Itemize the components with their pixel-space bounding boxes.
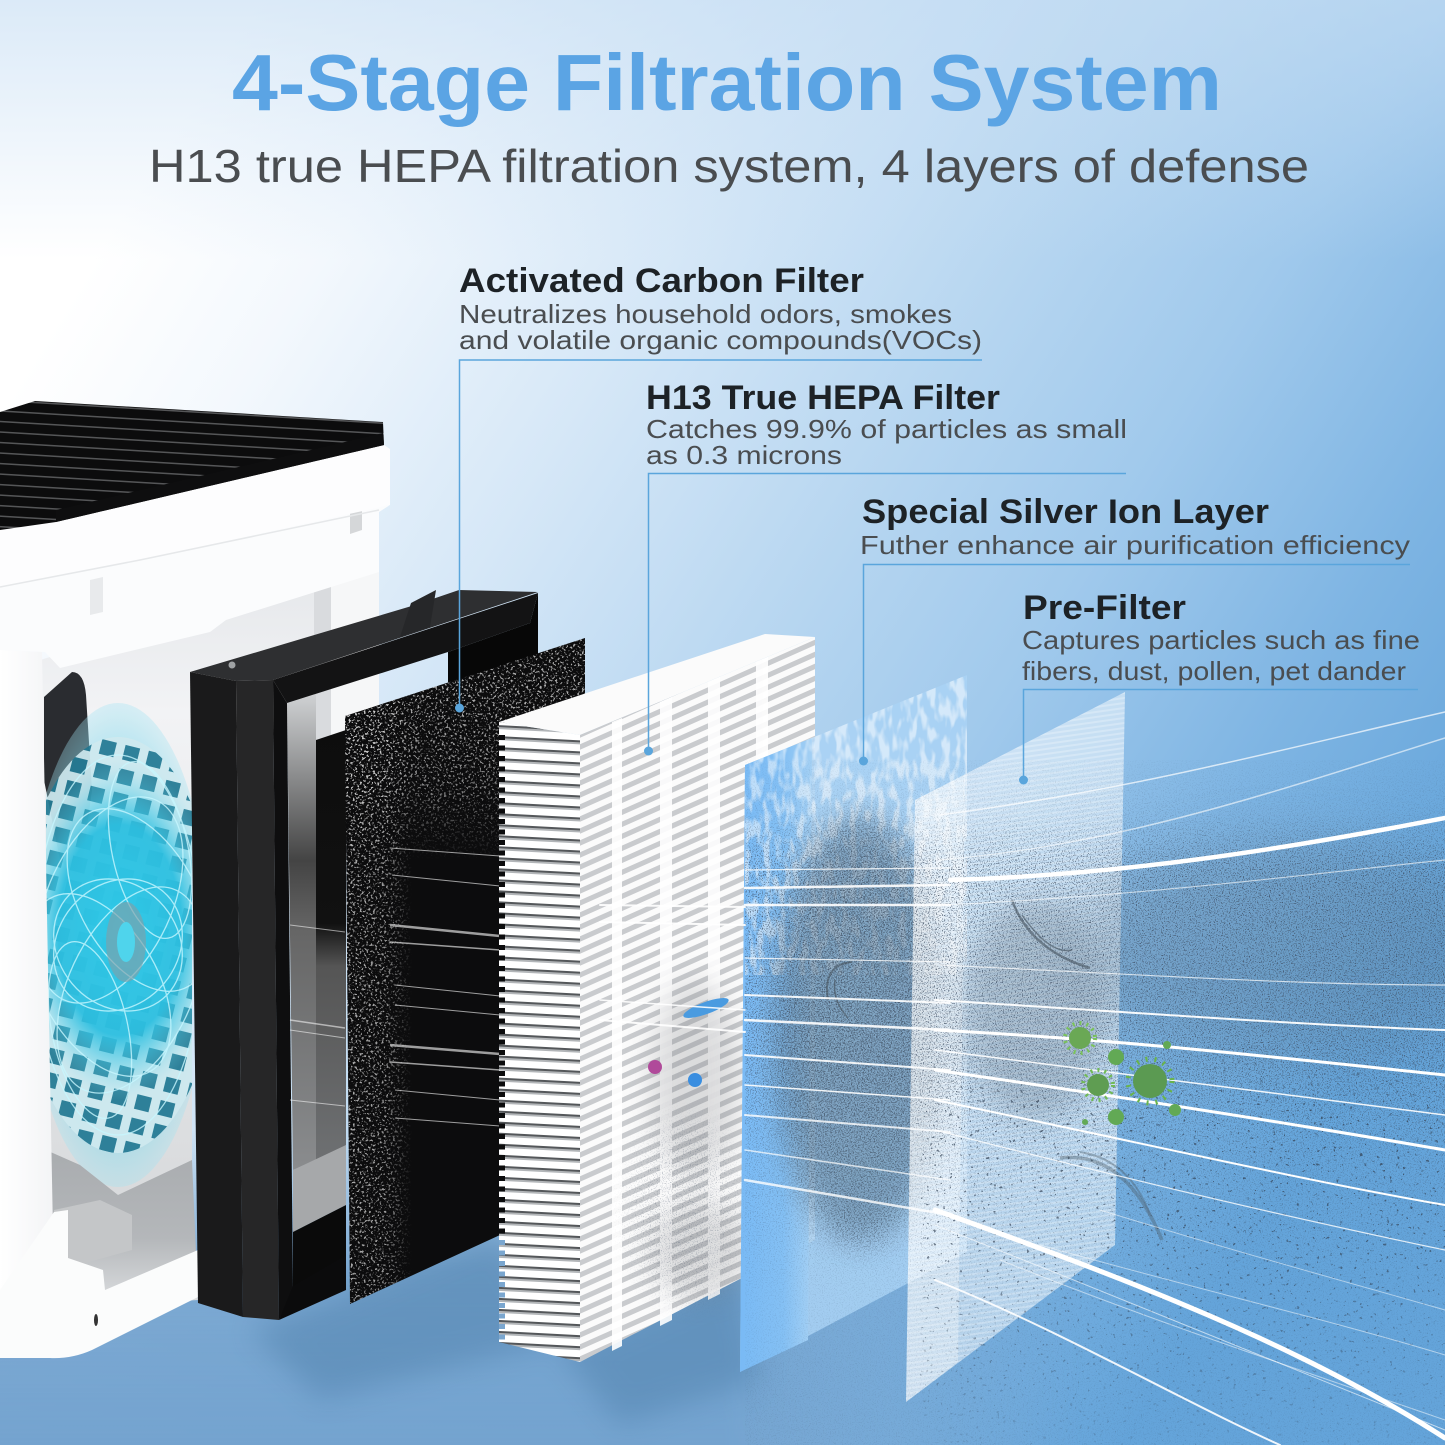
subtitle: H13 true HEPA filtration system, 4 layers of defense bbox=[149, 140, 1309, 192]
description bbox=[459, 299, 982, 355]
coarse dust spots bbox=[920, 1030, 1445, 1445]
carbon filter bbox=[345, 638, 585, 1304]
heading: Activated Carbon Filter bbox=[459, 262, 864, 300]
purifier base bbox=[0, 1210, 198, 1358]
opening view right bbox=[316, 730, 346, 1160]
grey dust haze bbox=[1070, 845, 1445, 1055]
HEPA filter bbox=[499, 634, 815, 1362]
fan mount bracket bbox=[44, 672, 92, 880]
heading: Special Silver Ion Layer bbox=[862, 493, 1269, 531]
HEPA vertical ribs bbox=[612, 657, 768, 1351]
green virus cluster bbox=[1065, 1023, 1181, 1125]
description: Neutralizes household odors, smokes bbox=[459, 299, 952, 329]
opening tray bbox=[293, 1145, 346, 1232]
grey tray bbox=[46, 1150, 198, 1310]
purifier rear column bbox=[314, 490, 379, 780]
floor shadows bbox=[250, 1230, 760, 1425]
air purifier unit bbox=[0, 401, 390, 1358]
air streaks through frame bbox=[290, 925, 345, 1106]
description: Catches 99.9% of particles as small bbox=[646, 414, 1127, 444]
floor shading bbox=[0, 1143, 931, 1445]
leader line bbox=[859, 564, 1410, 766]
title: 4-Stage Filtration System bbox=[232, 38, 1222, 127]
virus left bbox=[1083, 1070, 1113, 1100]
virus small group bbox=[1082, 1041, 1181, 1125]
heading: Pre-Filter bbox=[1023, 589, 1186, 627]
frame rail right bbox=[448, 593, 538, 698]
description: as 0.3 microns bbox=[646, 440, 842, 470]
HEPA side pleats bbox=[499, 722, 580, 1362]
fan with blue glow bbox=[46, 703, 192, 1187]
purifier shoulder bbox=[0, 505, 390, 668]
airflow lines bbox=[600, 712, 1445, 1445]
frame pull tab bbox=[400, 590, 436, 637]
silver ion layer bbox=[740, 675, 970, 1372]
opening view left bbox=[287, 694, 316, 1170]
top grille bbox=[0, 401, 384, 530]
frame top rail bbox=[273, 593, 538, 703]
callout: pre-filter bbox=[1019, 589, 1420, 784]
HEPA sawtooth edge bbox=[499, 735, 505, 1235]
HEPA front pleats bbox=[580, 637, 815, 1362]
description bbox=[646, 414, 1127, 470]
description: Captures particles such as fine bbox=[1022, 625, 1420, 655]
leader line bbox=[644, 474, 1126, 756]
hair strands bbox=[827, 900, 1162, 1240]
heading: H13 True HEPA Filter bbox=[646, 379, 1000, 417]
description: and volatile organic compounds(VOCs) bbox=[459, 325, 982, 355]
HEPA trapped dust bbox=[650, 980, 750, 1300]
blue and pink particles bbox=[648, 994, 731, 1087]
opening lower dark bbox=[293, 1205, 346, 1290]
left post bbox=[0, 650, 54, 1295]
frame bottom rail bbox=[279, 1255, 346, 1320]
base screw hole bbox=[94, 1314, 98, 1326]
callout: special silver ion layer bbox=[859, 493, 1410, 766]
callout: H13 true HEPA filter bbox=[644, 379, 1127, 756]
leader line bbox=[1019, 690, 1418, 784]
callout: activated carbon filter bbox=[455, 262, 982, 712]
HEPA top face bbox=[499, 634, 815, 735]
black filter frame bbox=[190, 590, 538, 1320]
frame printed logo bbox=[228, 662, 236, 668]
virus large bbox=[1128, 1059, 1172, 1103]
virus top bbox=[1065, 1023, 1095, 1053]
description: fibers, dust, pollen, pet dander bbox=[1022, 656, 1406, 686]
purifier top band bbox=[0, 445, 390, 587]
purifier inner wall bbox=[40, 578, 314, 1250]
frame top surface bbox=[190, 590, 538, 681]
top tint bbox=[0, 0, 1445, 260]
pre-filter bbox=[906, 692, 1125, 1402]
frame left column bbox=[190, 672, 243, 1317]
description: Futher enhance air purification efficiency bbox=[860, 530, 1410, 560]
dust particles bbox=[618, 760, 1445, 1445]
leader line bbox=[455, 360, 982, 712]
description bbox=[1022, 625, 1420, 686]
